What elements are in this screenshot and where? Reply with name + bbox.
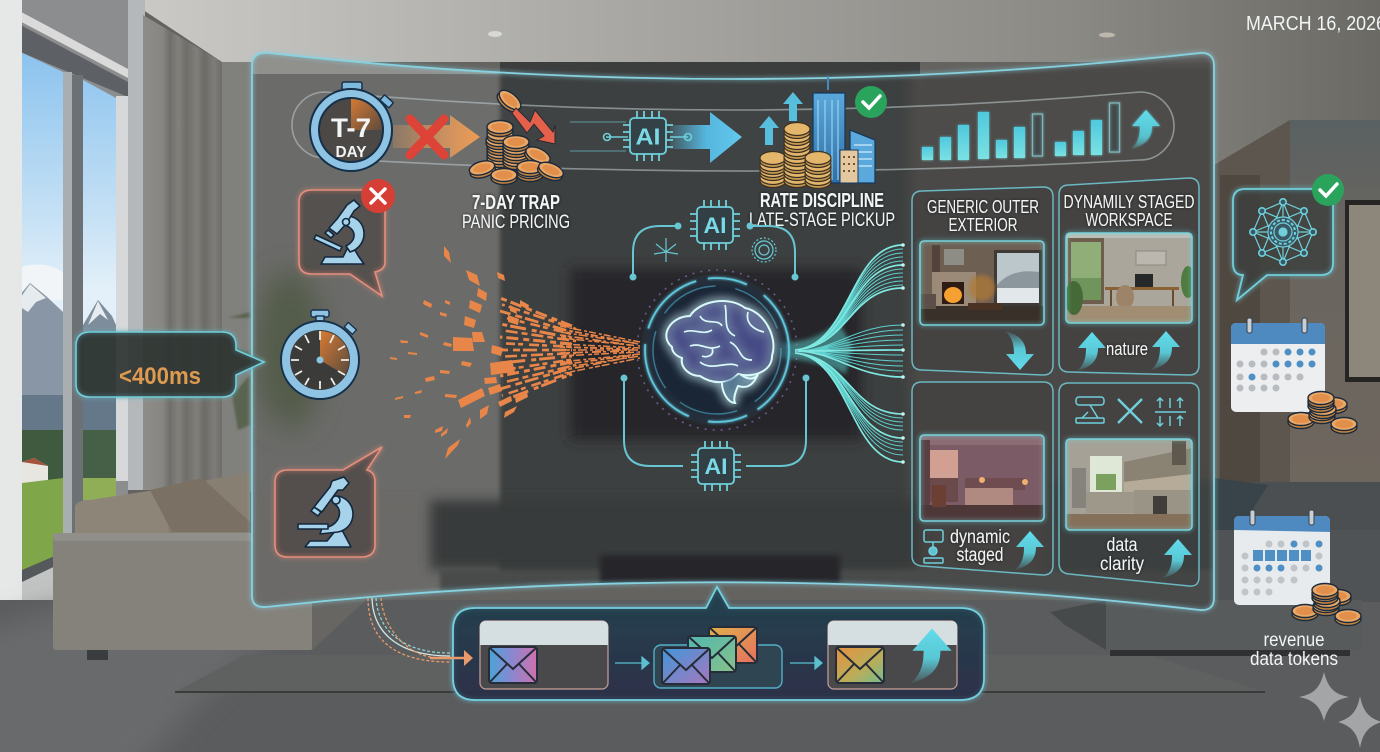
arrow: step two — [790, 657, 822, 669]
panel: dynamically staged workspace: WORKSPACE — [1086, 210, 1172, 230]
panel: curved holographic glass — [252, 50, 1230, 615]
panel: generic outer exterior: EXTERIOR — [948, 215, 1018, 235]
watermark sparkles — [1299, 672, 1380, 748]
callout: under 400ms: <400ms — [119, 363, 201, 390]
panel: dynamic staged: dynamic — [950, 527, 1010, 548]
icon: T-7 day stopwatch: T-7 — [331, 113, 371, 143]
photo: kitchen — [1066, 439, 1192, 530]
card: winning email — [828, 621, 957, 689]
photo: bedroom — [920, 435, 1044, 521]
panel: dynamically staged workspace — [1059, 178, 1199, 375]
panel: data clarity: clarity — [1100, 554, 1144, 575]
panel: generic outer exterior — [912, 187, 1053, 375]
icon: AI chip top — [690, 200, 740, 250]
icon: falling coins with red arrow — [468, 87, 565, 184]
icon: stage robot — [924, 530, 943, 563]
heading: rate discipline: RATE DISCIPLINE — [760, 190, 884, 212]
panel: generic outer exterior: GENERIC OUTER — [927, 197, 1039, 217]
callout: failed microscope — [299, 179, 395, 296]
arrow: step one — [615, 657, 649, 669]
icon: AI chip top: AI — [704, 213, 726, 238]
callout: lower microscope — [275, 447, 382, 557]
callout: network approved — [1233, 174, 1344, 300]
icon: AI chip bottom: AI — [704, 454, 728, 479]
panel: email sequence — [453, 587, 984, 700]
card: first email — [480, 621, 608, 689]
photo: workspace — [1065, 233, 1195, 323]
heading: 7-day trap: PANIC PRICING — [462, 212, 570, 233]
icon: stopwatch — [280, 310, 360, 400]
panel: data clarity: data — [1106, 535, 1138, 556]
label: revenue data tokens — [1250, 630, 1338, 670]
icon: glowing brain in ring — [637, 270, 797, 430]
icon: T-7 day stopwatch: DAY — [336, 144, 367, 161]
arrow: blocked orange arrow — [393, 115, 480, 158]
photo: living room with fireplace — [920, 241, 1044, 325]
panel: dynamically staged workspace: DYNAMILY STAGED — [1064, 192, 1194, 212]
chart: teal data streams leaving the brain — [772, 243, 905, 464]
heading: 7-day trap — [462, 192, 570, 233]
icon: AI chip with blue arrow: AI — [636, 124, 660, 150]
heading: 7-day trap: 7-DAY TRAP — [472, 192, 560, 214]
label: revenue data tokens: revenue — [1264, 630, 1324, 651]
label: revenue data tokens: data tokens — [1250, 649, 1338, 670]
icon: AI chip with blue arrow — [570, 111, 742, 163]
icon: calendar with bars and coins — [1234, 510, 1361, 626]
connectors around the brain — [620, 222, 810, 466]
panel: dynamic staged — [912, 382, 1053, 575]
callout: under 400ms — [76, 332, 264, 397]
bar chart — [922, 103, 1160, 160]
panel: dynamic staged: staged — [956, 545, 1004, 566]
panel: dynamically staged workspace: nature — [1106, 339, 1148, 359]
heading: rate discipline — [749, 190, 895, 231]
chart: orange data particles entering the brain — [390, 246, 640, 459]
arrow: dashed feed into the inbox panel — [368, 598, 473, 666]
heading: rate discipline: LATE-STAGE PICKUP — [749, 210, 895, 231]
icons: tools row — [1076, 397, 1186, 426]
icon: city and coin stacks — [759, 76, 887, 188]
top pipeline capsule — [292, 92, 1174, 171]
icon: T-7 day stopwatch — [309, 82, 393, 172]
card: email stack — [654, 627, 782, 688]
icon: AI chip bottom — [691, 441, 741, 491]
icon: calendar with coins — [1231, 318, 1357, 434]
panel: data clarity — [1059, 383, 1199, 586]
